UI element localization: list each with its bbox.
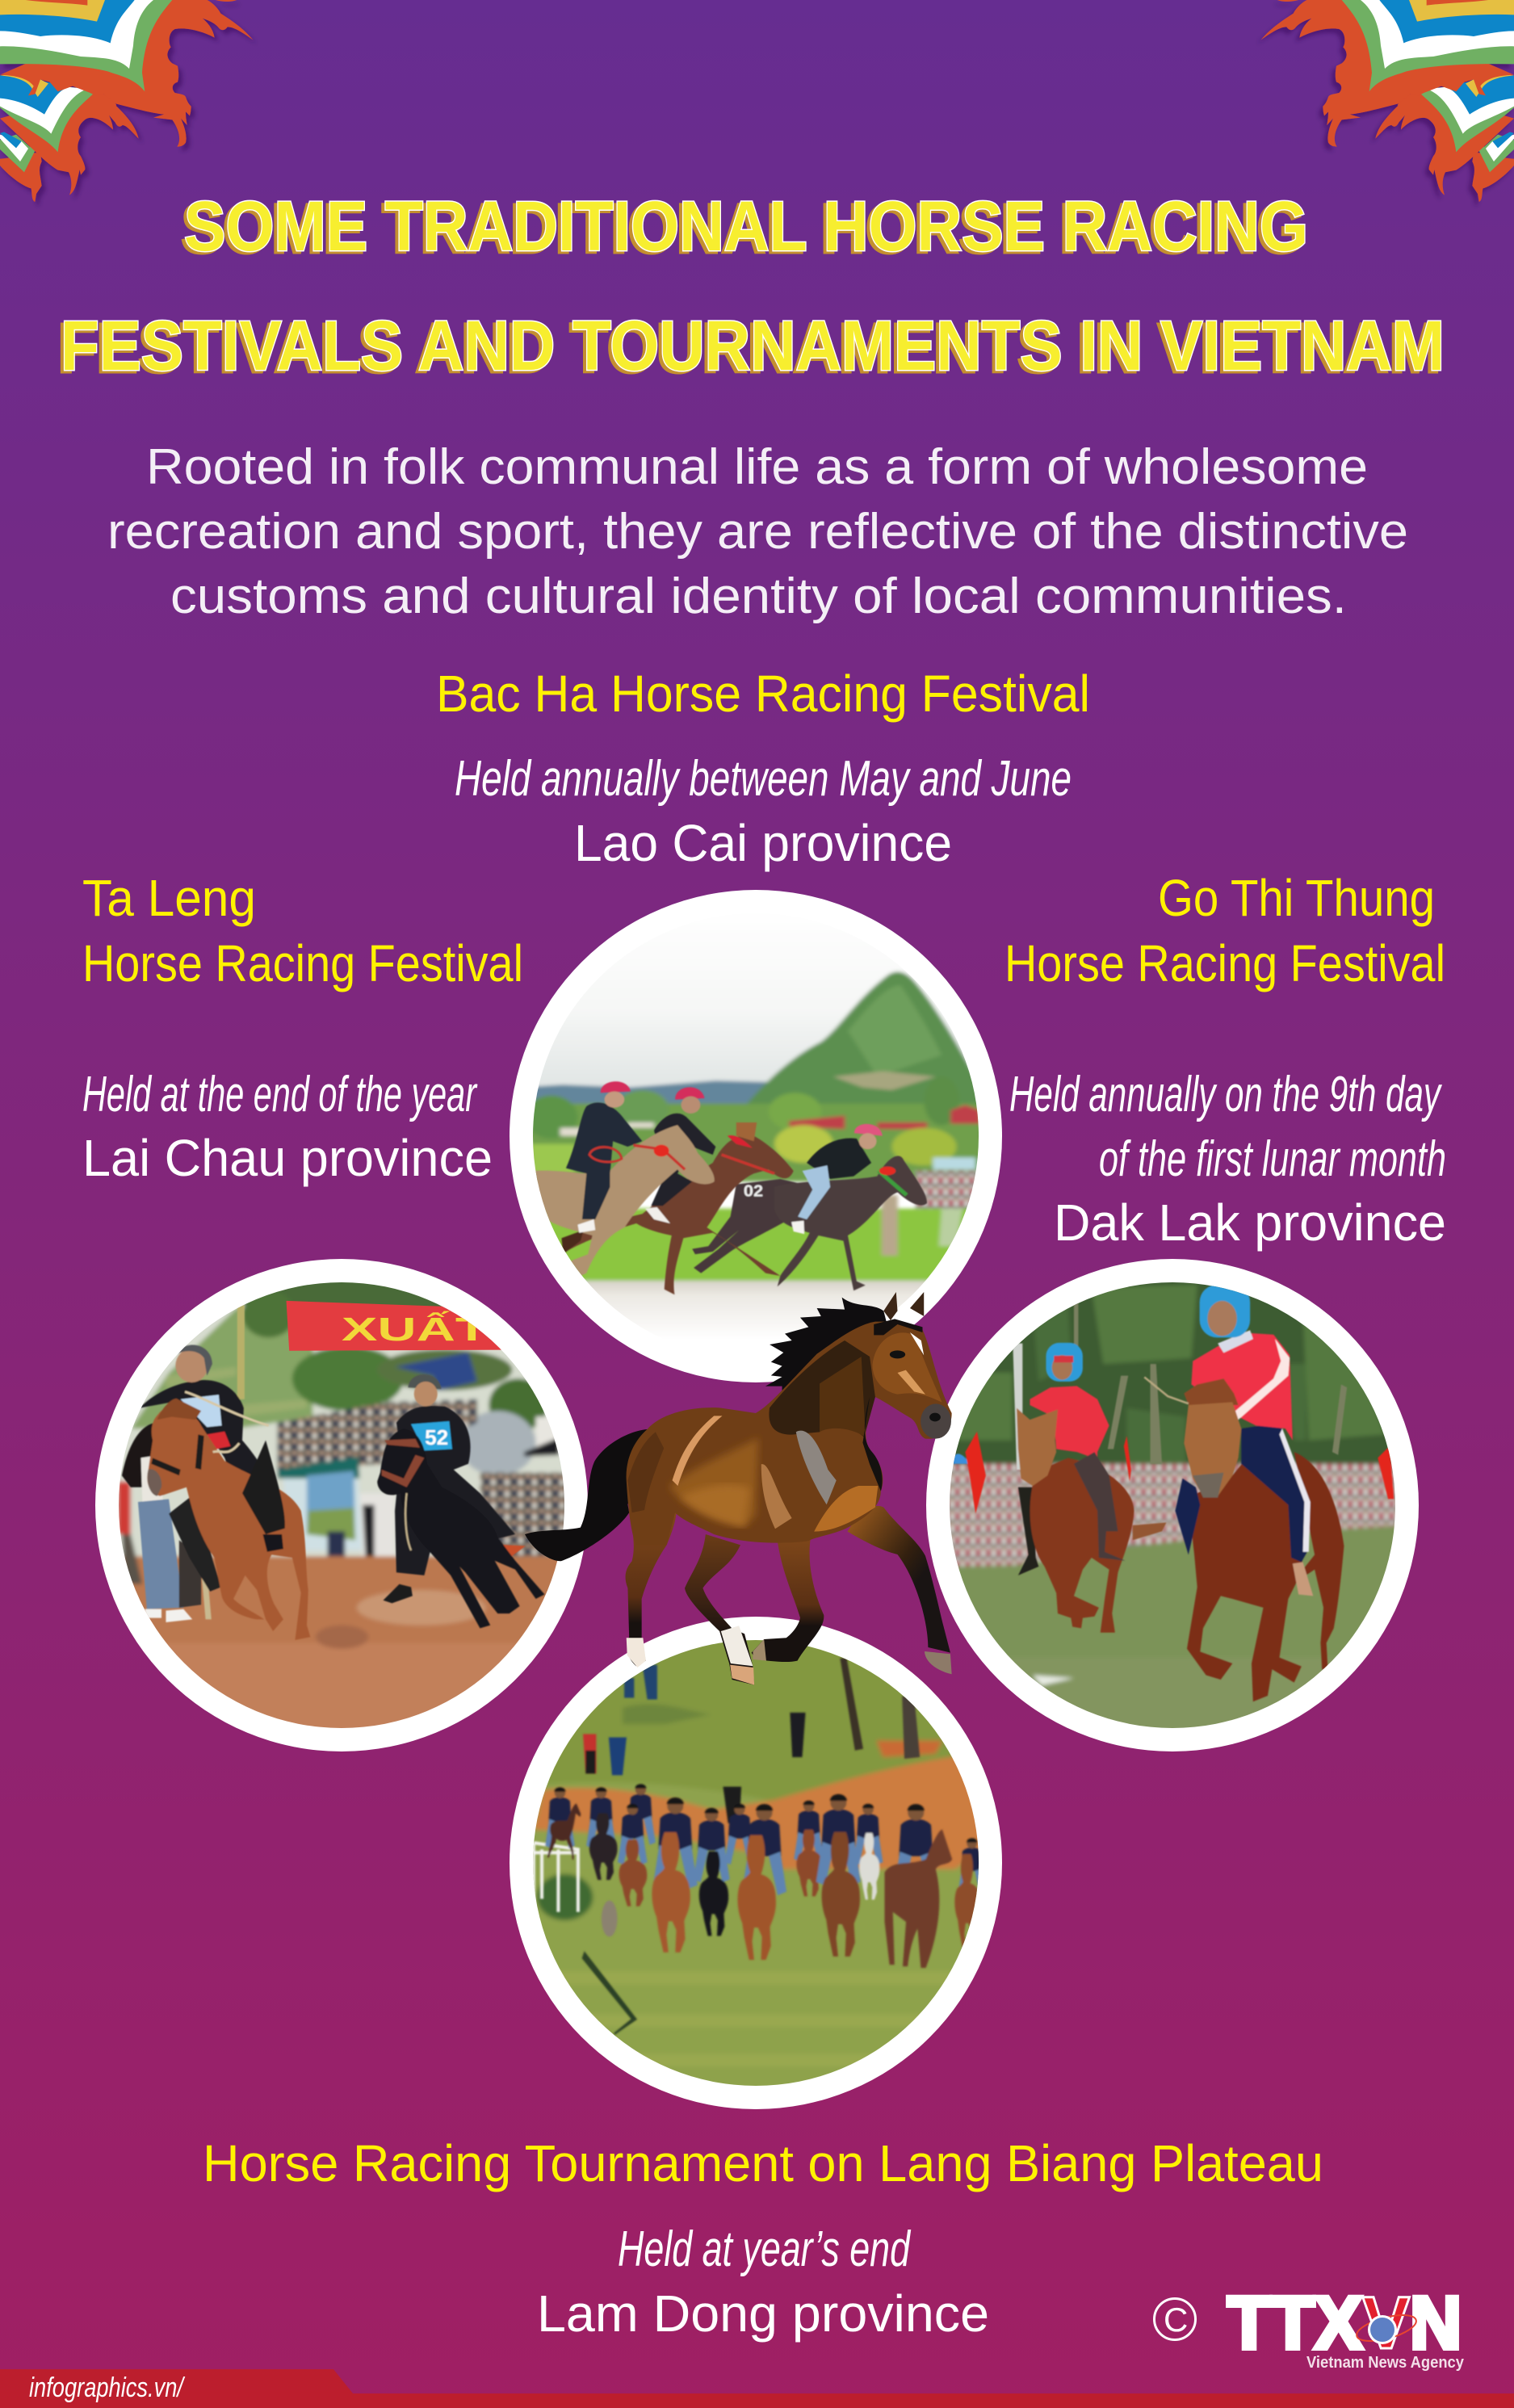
intro text: customs and cultural identity of local communities.	[170, 568, 1347, 624]
text block: Lang Biang tournament: Lam Dong province	[537, 2284, 989, 2343]
body shading	[627, 1319, 951, 1532]
globe in logo	[1354, 2310, 1419, 2346]
text block: Go Thi Thung festival: Horse Racing Festival	[1004, 934, 1445, 992]
copyright symbol: C	[1164, 2301, 1188, 2339]
text block: Ta Leng festival	[82, 869, 523, 1187]
intro text: recreation and sport, they are reflective of the distinctive	[107, 504, 1408, 560]
horse running in the centre	[525, 1292, 952, 1685]
copyright symbol	[1155, 2298, 1195, 2340]
text block: Bac Ha festival	[436, 665, 1090, 872]
footer source text: infographics.vn/	[29, 2372, 186, 2403]
photo circle: Bac Ha race	[510, 890, 1002, 1382]
text block: Bac Ha festival: Held annually between May and June	[455, 751, 1072, 807]
photo circle: Ta Leng race	[95, 1259, 588, 1751]
decorative corner ornament left	[0, 0, 253, 202]
near hind leg	[626, 1512, 677, 1666]
banner in photo	[287, 1301, 504, 1351]
white socks and hooves	[627, 1626, 952, 1685]
text block: Lang Biang tournament	[203, 2134, 1323, 2343]
title	[61, 187, 1445, 385]
text block: Go Thi Thung festival	[1004, 869, 1446, 1252]
logo: TTXVN: TTXVN	[1227, 2282, 1462, 2364]
text block: Lang Biang tournament: Horse Racing Tournament on Lang Biang Plateau	[203, 2134, 1323, 2192]
banner in photo: XUẤT	[342, 1311, 489, 1348]
text block: Ta Leng festival: Ta Leng	[82, 869, 256, 927]
text block: Bac Ha festival: Lao Cai province	[574, 814, 952, 872]
intro text	[107, 439, 1408, 624]
text block: Bac Ha festival: Bac Ha Horse Racing Festival	[436, 665, 1090, 723]
title: SOME TRADITIONAL HORSE RACING	[184, 187, 1308, 266]
photo circle: Ta Leng race: 52	[425, 1425, 448, 1449]
far hind leg	[685, 1534, 754, 1685]
text block: Lang Biang tournament: Held at year’s end	[618, 2221, 912, 2277]
text block: Go Thi Thung festival: Go Thi Thung	[1158, 869, 1435, 927]
footer band	[0, 2369, 1514, 2408]
intro text: Rooted in folk communal life as a form of wholesome	[146, 439, 1368, 495]
mane	[765, 1298, 887, 1395]
logo: TTXVN: Vietnam News Agency	[1306, 2354, 1465, 2372]
text block: Go Thi Thung festival: Dak Lak province	[1054, 1194, 1446, 1252]
text block: Ta Leng festival: Horse Racing Festival	[82, 934, 523, 992]
ears	[883, 1292, 924, 1320]
photo circle: Bac Ha race: 02	[744, 1182, 763, 1200]
photo circle: Lang Biang race	[510, 1617, 1002, 2109]
tail	[525, 1429, 648, 1561]
front straight leg	[848, 1506, 950, 1653]
front bent leg	[752, 1534, 824, 1662]
decorative corner ornament right	[1261, 0, 1514, 202]
text block: Ta Leng festival: Lai Chau province	[82, 1129, 493, 1187]
text block: Ta Leng festival: Held at the end of the year	[82, 1067, 478, 1122]
photo circle: Go Thi Thung race	[926, 1259, 1419, 1751]
body, neck and head	[627, 1322, 952, 1545]
